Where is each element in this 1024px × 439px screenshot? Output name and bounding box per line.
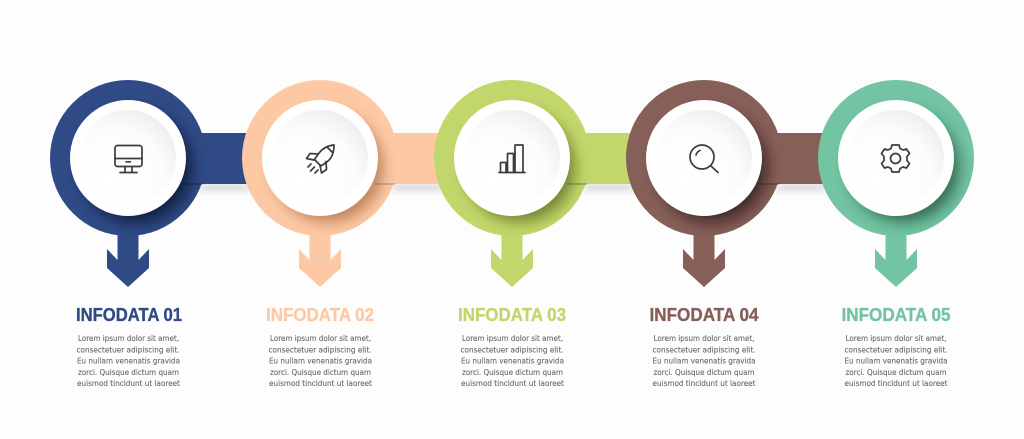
ring 2 bbox=[242, 80, 398, 236]
disc 3 bbox=[454, 100, 570, 216]
text block 3: Lorem ipsum dolor sit amet, bbox=[462, 333, 563, 343]
connector band 4 bbox=[704, 133, 896, 191]
text block 3: zorci. Quisque dictum quam bbox=[462, 367, 563, 377]
text block 1: zorci. Quisque dictum quam bbox=[78, 367, 179, 377]
text block 4 bbox=[652, 333, 756, 388]
text block 4: zorci. Quisque dictum quam bbox=[654, 367, 754, 377]
text block 4: euismod tincidunt ut laoreet bbox=[652, 378, 756, 388]
text block 2: zorci. Quisque dictum quam bbox=[270, 367, 371, 377]
text block 5: euismod tincidunt ut laoreet bbox=[844, 378, 948, 388]
step 2: peach node bbox=[242, 80, 442, 287]
step 4: brown node bbox=[626, 80, 826, 287]
ring 1 bbox=[50, 80, 206, 236]
heading 4: INFODATA 04 bbox=[650, 305, 758, 325]
icon: magnifier bbox=[690, 145, 718, 172]
arrow 1 bbox=[107, 230, 149, 287]
text block 3: euismod tincidunt ut laoreet bbox=[461, 378, 565, 388]
text block 1 bbox=[76, 333, 181, 388]
disc 5 bbox=[838, 100, 954, 216]
text block 5: zorci. Quisque dictum quam bbox=[846, 367, 946, 377]
text block 3: consectetuer adipiscing elit. bbox=[460, 344, 564, 354]
text block 5 bbox=[844, 333, 948, 388]
text block 2: consectetuer adipiscing elit. bbox=[268, 344, 372, 354]
icon: monitor bbox=[115, 146, 142, 172]
step 3: green node bbox=[434, 80, 634, 287]
arrow 5 bbox=[875, 230, 917, 287]
connector band 2 bbox=[320, 133, 512, 191]
disc 1 bbox=[70, 100, 186, 216]
connector band 3 bbox=[512, 133, 704, 191]
text block 3 bbox=[460, 333, 565, 388]
text block 5: Eu nullam venenatis gravida bbox=[844, 356, 948, 366]
arrow 2 bbox=[299, 230, 341, 287]
text block 1: euismod tincidunt ut laoreet bbox=[77, 378, 181, 388]
heading 1: INFODATA 01 bbox=[76, 305, 182, 325]
text block 5: consectetuer adipiscing elit. bbox=[844, 344, 948, 354]
text block 2 bbox=[268, 333, 373, 388]
step 5: teal node bbox=[818, 80, 974, 287]
text block 2: Eu nullam venenatis gravida bbox=[269, 356, 372, 366]
ring 4 bbox=[626, 80, 782, 236]
icon: rocket bbox=[306, 145, 334, 173]
step 1: navy node bbox=[50, 80, 250, 287]
heading 5: INFODATA 05 bbox=[842, 305, 950, 325]
text block 5: Lorem ipsum dolor sit amet, bbox=[846, 333, 946, 343]
text block 1: Lorem ipsum dolor sit amet, bbox=[78, 333, 179, 343]
text block 3: Eu nullam venenatis gravida bbox=[461, 356, 564, 366]
heading 2: INFODATA 02 bbox=[266, 305, 374, 325]
text block 1: consectetuer adipiscing elit. bbox=[76, 344, 180, 354]
text block 4: consectetuer adipiscing elit. bbox=[652, 344, 756, 354]
connector band 1 bbox=[128, 133, 320, 191]
ring 3 bbox=[434, 80, 590, 236]
text block 4: Eu nullam venenatis gravida bbox=[652, 356, 756, 366]
heading 3: INFODATA 03 bbox=[458, 305, 566, 325]
arrow 3 bbox=[491, 230, 533, 287]
text block 4: Lorem ipsum dolor sit amet, bbox=[654, 333, 754, 343]
text block 2: Lorem ipsum dolor sit amet, bbox=[270, 333, 371, 343]
disc 2 bbox=[262, 100, 378, 216]
text block 1: Eu nullam venenatis gravida bbox=[77, 356, 180, 366]
disc 4 bbox=[646, 100, 762, 216]
icon: gear bbox=[882, 145, 910, 172]
text block 2: euismod tincidunt ut laoreet bbox=[269, 378, 373, 388]
ring 5 bbox=[818, 80, 974, 236]
icon: bar chart bbox=[499, 145, 525, 172]
arrow 4 bbox=[683, 230, 725, 287]
